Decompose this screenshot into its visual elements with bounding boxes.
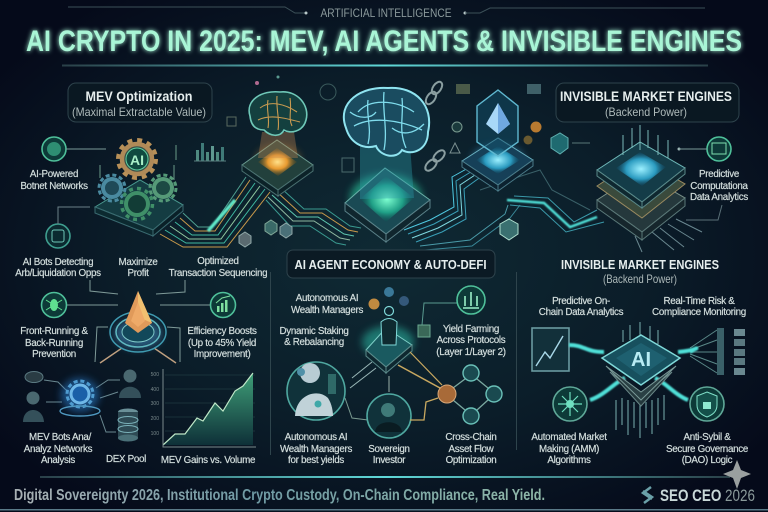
divider left — [270, 272, 272, 455]
label: Cross-Chain Asset Flow Optimization: Cross-Chain — [445, 432, 497, 443]
label: Front-Running: Front-Running & — [20, 326, 88, 337]
label: Maximize Profit — [119, 257, 158, 279]
illustration: central AI chip with flows: AI — [631, 349, 651, 371]
label: Sovereign Investor: Investor — [373, 455, 406, 466]
label: Yield Farming: Across Protocols — [437, 335, 506, 346]
label: Predictive Computationa Data Analytics: Computationa — [690, 181, 749, 192]
illustration: Ethereum crystal on chip — [462, 90, 533, 191]
illustration: large brain on chip — [320, 84, 430, 242]
label: MEV Bots Analysis — [24, 432, 93, 466]
label: Cross-Chain Asset Flow Optimization: Asset Flow — [449, 444, 495, 455]
panel: Invisible market engines top heading: INVISIBLE MARKET ENGINES — [560, 89, 732, 104]
chart: MEV gains vs volume: 200 — [151, 416, 159, 422]
icon: AI bots chip — [46, 207, 90, 248]
icon: growth chart — [210, 292, 236, 318]
label: AI Bots Detecting — [15, 257, 101, 279]
label: Optimized Transaction Sequencing: Transaction Sequencing — [169, 268, 267, 279]
label: Dynamic Staking — [279, 326, 349, 348]
label: Cross-Chain Asset Flow Optimization — [445, 432, 497, 466]
bottom edge — [0, 509, 768, 510]
icon: coin and token cluster — [450, 84, 590, 154]
footer rule — [40, 476, 730, 478]
label: Front-Running: Back-Running — [25, 338, 83, 349]
label: Yield Farming: (Layer 1/Layer 2) — [436, 347, 506, 358]
icon: bug — [42, 292, 66, 318]
panel: Invisible market engines top heading: (Backend Power) — [605, 105, 687, 119]
label: MEV Gains vs. Volume: MEV Gains vs. Volume — [161, 455, 256, 466]
label: MEV Bots Analysis: MEV Bots Ana/ — [29, 432, 92, 443]
icon: predictive computation monitor — [678, 137, 731, 161]
panel: AI Agent heading — [287, 250, 495, 278]
label: Front-Running: Prevention — [32, 349, 76, 360]
title rule — [62, 64, 708, 66]
illustration: central AI chip with flows — [569, 322, 696, 438]
chart: on-chain analytics document — [532, 328, 569, 371]
label: Anti-Sybil: (DAO) Logic — [682, 455, 733, 466]
label: Maximize Profit: Maximize — [119, 257, 158, 268]
panel: Invisible market engines lower heading: (Backend Power) — [603, 272, 677, 286]
footer text: Digital Sovereignty 2026, Institutional Crypto Custody, On-Chain Compliance, Real Yield. — [14, 487, 545, 504]
label: Automated Market Making: Algorithms — [547, 455, 591, 466]
icon: sparkle star — [723, 460, 751, 489]
panel: AI Agent heading: AI AGENT ECONOMY & AUTO-DEFI — [294, 257, 486, 272]
label: Anti-Sybil: Anti-Sybil & — [683, 432, 731, 443]
label: Efficiency Boosts — [187, 326, 257, 360]
illustration: cross-chain asset flow — [398, 352, 502, 424]
label: Front-Running — [20, 326, 88, 360]
chart: small bar cluster — [194, 143, 226, 161]
label: AI-Powered Botnet Networks: AI-Powered — [30, 169, 78, 180]
circuit traces — [160, 167, 722, 252]
label: Real-Time Risk — [652, 296, 746, 318]
illustration: gears on platform: AI — [130, 152, 144, 168]
label: Autonomous AI Wealth Managers — [291, 293, 363, 316]
label: Autonomous AI Wealth Managers: Wealth Managers — [291, 305, 363, 316]
chart: MEV gains vs volume: 300 — [151, 401, 159, 407]
illustration: gears on platform — [95, 140, 183, 236]
label: Efficiency Boosts: Improvement) — [194, 349, 250, 360]
label: Predictive Computationa Data Analytics: Data Analytics — [690, 192, 748, 203]
panel: Invisible market engines lower heading: INVISIBLE MARKET ENGINES — [561, 257, 719, 272]
label: Optimized Transaction Sequencing: Optimized — [197, 256, 239, 267]
illustration: Ethereum core with rings — [110, 291, 166, 352]
illustration: sovereign investor — [345, 376, 411, 438]
label: DEX Pool: DEX Pool — [106, 454, 146, 465]
label: Autonomous AI Wealth Managers for best yields: Wealth Managers — [280, 444, 352, 455]
label: Anti-Sybil: Secure Governance — [666, 444, 749, 455]
label: Autonomous AI Wealth Managers for best yields: Autonomous AI — [285, 432, 347, 443]
label: Yield Farming: Yield Farming — [443, 324, 499, 335]
icon: compliance data list — [690, 328, 745, 375]
label: AI-Powered Botnet Networks: Botnet Networks — [20, 181, 88, 192]
label: Automated Market Making — [531, 432, 607, 466]
label: Autonomous AI Wealth Managers for best yields: for best yields — [288, 455, 344, 466]
label: Sovereign Investor: Sovereign — [368, 444, 410, 455]
label: Optimized Transaction Sequencing — [169, 256, 267, 279]
label: Cross-Chain Asset Flow Optimization: Optimization — [446, 455, 496, 466]
label: Efficiency Boosts: (Up to 45% Yield — [188, 338, 256, 349]
label: AI Bots Detecting: AI Bots Detecting — [23, 257, 93, 268]
label: Yield Farming — [436, 324, 506, 358]
label: Autonomous AI Wealth Managers for best yields — [280, 432, 352, 466]
logo: SEO CEO 2026: SEO CEO 2026 — [660, 487, 755, 505]
illustration: MEV bot network — [23, 370, 141, 442]
label: Dynamic Staking: & Rebalancing — [284, 337, 344, 348]
label: Automated Market Making: Automated Market — [531, 432, 607, 443]
label: Predictive On-Chain: Chain Data Analytics — [539, 307, 624, 318]
label: Automated Market Making: Making (AMM) — [539, 444, 599, 455]
chart: MEV gains vs volume — [151, 369, 256, 447]
icon: chain links — [423, 80, 447, 173]
header: top label: ARTIFICIAL INTELLIGENCE — [320, 8, 452, 20]
label: MEV Bots Analysis: Analysis — [41, 455, 75, 466]
label: MEV Bots Analysis: Analyz Networks — [24, 444, 93, 455]
panel: MEV heading: MEV Optimization — [86, 88, 192, 104]
label: AI-Powered Botnet Networks — [20, 169, 88, 192]
illustration: person on chip — [362, 287, 414, 373]
illustration: robot wealth manager — [287, 362, 376, 420]
connectors around Ethereum core — [66, 280, 210, 363]
panel: MEV heading — [68, 83, 212, 122]
label: Predictive On-Chain — [539, 296, 624, 318]
icon: small cubes along circuit — [239, 219, 518, 247]
label: Predictive Computationa Data Analytics — [690, 169, 749, 203]
label: Autonomous AI Wealth Managers: Autonomous AI — [296, 293, 358, 304]
illustration: stacked server layers — [597, 125, 685, 240]
label: Real-Time Risk: Compliance Monitoring — [652, 307, 746, 318]
icon: shield lock — [690, 387, 724, 421]
label: Efficiency Boosts: Efficiency Boosts — [187, 326, 257, 337]
panel: MEV heading: (Maximal Extractable Value) — [72, 105, 206, 119]
chart: MEV gains vs volume: 100 — [151, 431, 159, 437]
label: Anti-Sybil — [666, 432, 749, 466]
divider right — [516, 272, 518, 450]
icon: automated market making — [553, 387, 587, 421]
header: top label — [68, 7, 705, 20]
label: Dynamic Staking: Dynamic Staking — [279, 326, 349, 337]
illustration: small brain on chip — [227, 76, 313, 196]
panel: Invisible market engines top heading — [556, 83, 739, 122]
label: Predictive Computationa Data Analytics: Predictive — [699, 169, 740, 180]
label: Maximize Profit: Profit — [127, 268, 149, 279]
panel: Invisible market engines lower heading — [561, 257, 719, 286]
chart: MEV gains vs volume: 500 — [151, 372, 159, 378]
icon: yield farming — [418, 286, 485, 337]
label: Real-Time Risk: Real-Time Risk & — [663, 296, 735, 307]
label: AI Bots Detecting: Arb/Liquidation Opps — [15, 268, 101, 279]
chart: MEV gains vs volume: 400 — [151, 387, 159, 393]
icon: AI-powered botnet network — [42, 137, 106, 161]
label: Predictive On-Chain: Predictive On- — [552, 296, 610, 307]
label: Sovereign Investor — [368, 444, 410, 466]
